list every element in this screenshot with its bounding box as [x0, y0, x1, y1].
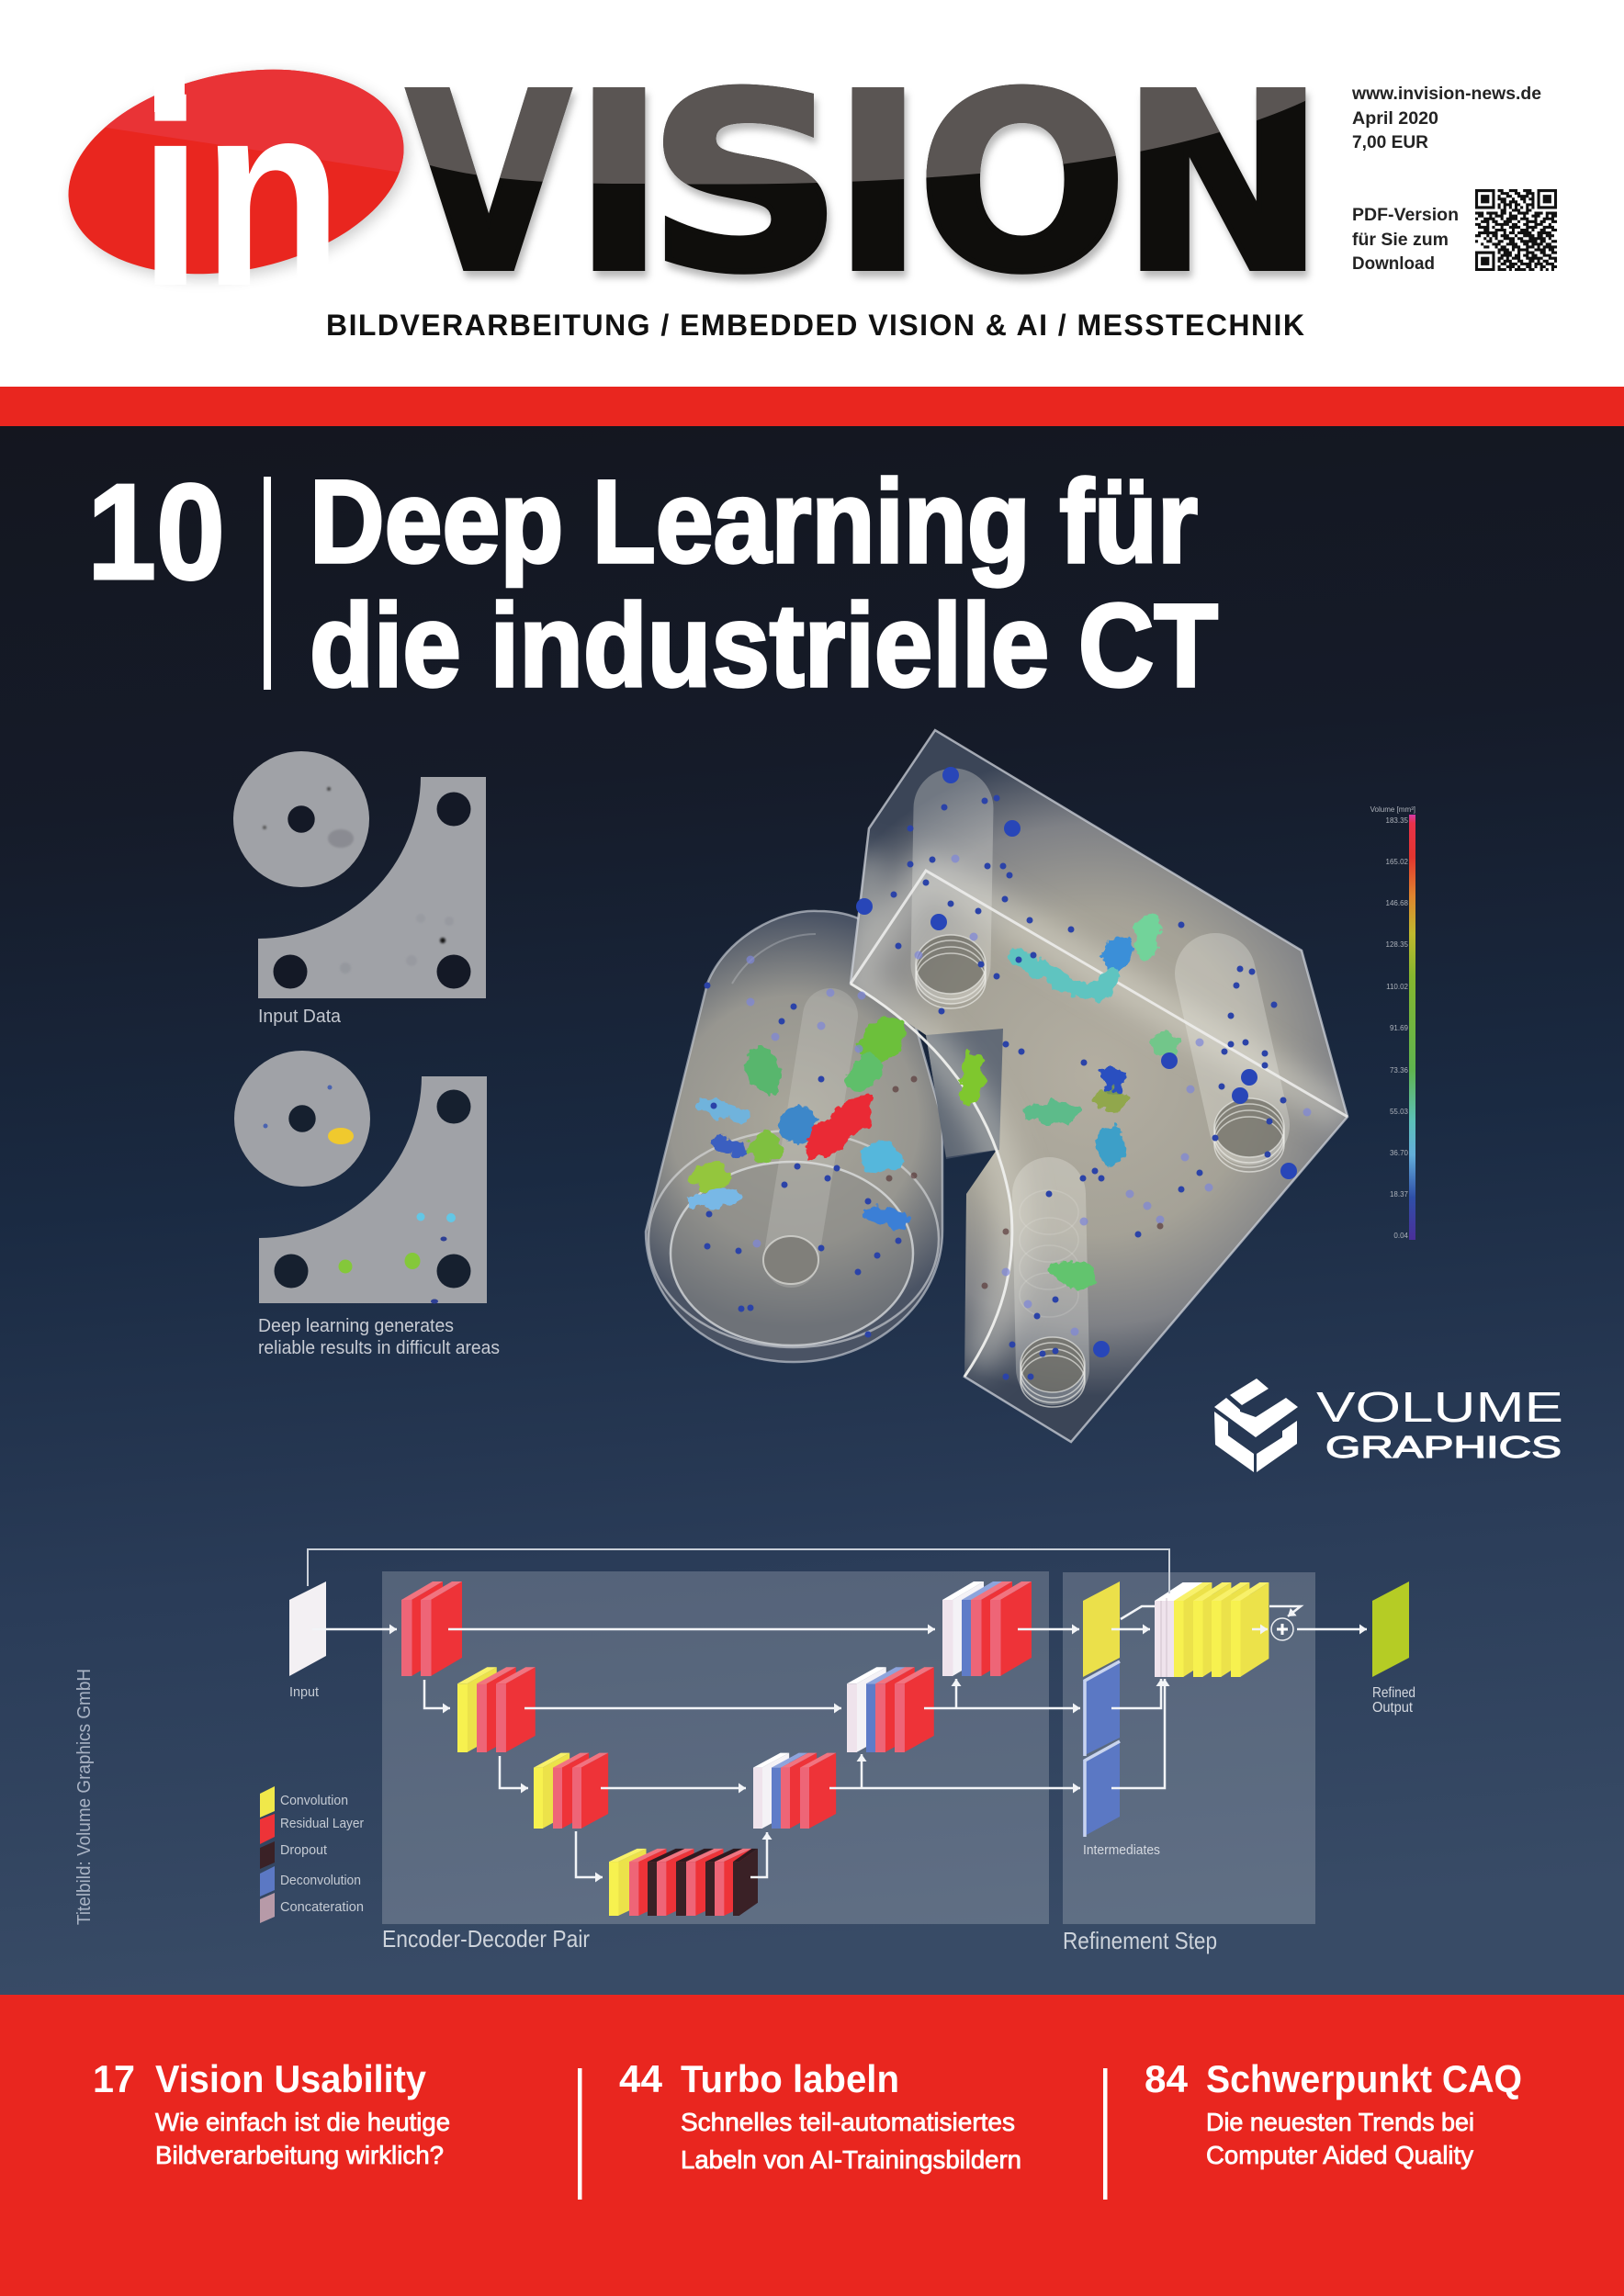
wordmark: GRAPHICS: [1325, 1430, 1562, 1464]
refinement blocks: [1155, 1582, 1269, 1677]
teaser: Vision Usability: Wie einfach ist die heutige: [155, 2108, 450, 2136]
refined output: Output: [1372, 1700, 1414, 1716]
colour scale legend: 110.02: [1386, 983, 1409, 991]
teaser: Schwerpunkt CAQ: 84: [1145, 2057, 1189, 2100]
colour scale legend: Volume [mm³]: [1370, 805, 1415, 814]
caption: deep learning: Deep learning generates: [258, 1316, 454, 1336]
teaser divider: [578, 2068, 582, 2200]
intermediates: Intermediates: [1083, 1842, 1160, 1858]
teaser: Vision Usability: Bildverarbeitung wirklich?: [155, 2141, 444, 2169]
issue information: www.invision-news.de: [1351, 84, 1541, 104]
network diagram: [260, 1549, 1415, 1954]
encoder blocks row 2: [457, 1667, 536, 1752]
intermediates: [1083, 1581, 1160, 1858]
panel: Encoder-Decoder: [382, 1571, 1049, 1953]
input block: [289, 1581, 326, 1700]
teaser: Schwerpunkt CAQ: Computer Aided Quality: [1206, 2141, 1473, 2169]
headline text: die industrielle CT: [310, 580, 1218, 712]
decoder blocks row 3: [753, 1753, 836, 1829]
bores: [951, 808, 1249, 1368]
plate part: [851, 730, 1348, 1442]
teaser: Vision Usability: Vision Usability: [155, 2057, 427, 2100]
photo credit: Titelbild: Volume Graphics GmbH: [74, 1669, 95, 1925]
bottleneck blocks: [609, 1849, 758, 1916]
headline divider: [264, 477, 271, 690]
colour scale legend: 91.69: [1390, 1024, 1409, 1032]
caption: deep learning: [258, 1316, 500, 1358]
panel: Encoder-Decoder: Encoder-Decoder Pair: [382, 1925, 590, 1953]
issue information: Download: [1352, 254, 1435, 274]
issue information: [1351, 84, 1541, 274]
footer band: [0, 1995, 1624, 2296]
caption: deep learning: reliable results in difficult areas: [258, 1338, 500, 1358]
teaser: Vision Usability: 17: [93, 2057, 135, 2100]
logo: VISION wordmark: V: [407, 41, 570, 326]
logo: VISION wordmark: O: [917, 41, 1128, 326]
wordmark: [1316, 1383, 1563, 1464]
subtitle: BILDVERARBEITUNG / EMBEDDED VISION & AI / MESSTECHNIK: [326, 309, 1304, 342]
logo: VISION wordmark: N: [1121, 41, 1325, 326]
teaser: Turbo labeln: Labeln von AI-Trainingsbildern: [681, 2145, 1021, 2174]
teaser: Turbo labeln: Turbo labeln: [681, 2057, 899, 2100]
icon: QR code: [1475, 189, 1557, 271]
refined output: Refined: [1372, 1685, 1415, 1701]
logo: VISION wordmark: I: [573, 41, 665, 326]
colour scale legend: 128.35: [1386, 940, 1409, 949]
teaser: Schwerpunkt CAQ: [1145, 2057, 1522, 2169]
logo: VISION wordmark: I: [832, 41, 924, 326]
colour scale legend: 73.36: [1390, 1066, 1409, 1075]
wordmark: VOLUME: [1316, 1383, 1563, 1431]
panel: Refinement: Refinement Step: [1063, 1927, 1217, 1954]
refined output: [1372, 1581, 1415, 1716]
decoder blocks row 1: [942, 1581, 1032, 1676]
decoder blocks row 2: [847, 1667, 934, 1752]
caption: Input Data: Input Data: [258, 1007, 342, 1027]
teaser: Turbo labeln: [619, 2057, 1021, 2174]
colour scale legend: [1370, 805, 1415, 1240]
headline: [87, 456, 1218, 712]
colour scale legend: 36.70: [1390, 1149, 1409, 1157]
colour scale legend: 18.37: [1390, 1190, 1409, 1199]
encoder blocks row 1: [401, 1581, 462, 1676]
panel: Refinement: [1063, 1572, 1315, 1954]
dark background panel: [0, 426, 1624, 1995]
red band: [0, 387, 1624, 426]
encoder blocks row 3: [534, 1753, 608, 1829]
logo: VISION wordmark: [0, 0, 1624, 367]
issue information: für Sie zum: [1352, 231, 1449, 250]
legend: Convolution: [280, 1793, 348, 1808]
header: logo "inVISION": [66, 68, 1312, 285]
cylinder part: [646, 911, 942, 1362]
input block: Input: [289, 1684, 320, 1700]
page number 10: 10: [87, 456, 225, 608]
CT slice: input data: [233, 751, 486, 1027]
logo: VISION wordmark: S: [647, 41, 844, 326]
Volume Graphics logo: [1214, 1379, 1563, 1472]
teaser divider: [1103, 2068, 1108, 2200]
colour scale legend: 55.03: [1390, 1108, 1409, 1116]
logo: red ellipse with "in": in: [139, 47, 343, 341]
headline text: [310, 456, 1218, 712]
colour scale legend: 0.04: [1393, 1232, 1409, 1240]
plate edges: [851, 730, 1348, 1442]
legend: [260, 1786, 364, 1923]
defects: large coloured blobs: [687, 910, 1179, 1291]
legend: Concateration: [280, 1899, 364, 1915]
3D CT rendering: [646, 730, 1348, 1442]
legend: Residual Layer: [280, 1816, 364, 1831]
legend: Dropout: [280, 1842, 328, 1858]
colour scale legend: 146.68: [1386, 899, 1409, 907]
issue information: PDF-Version: [1352, 206, 1459, 225]
issue information: April 2020: [1352, 109, 1438, 129]
headline text: Deep Learning für: [310, 456, 1198, 588]
issue information: 7,00 EUR: [1352, 133, 1428, 152]
arrows: [308, 1549, 1367, 1877]
icon: Volume Graphics cube: [1214, 1379, 1298, 1472]
teaser: Turbo labeln: Schnelles teil-automatisiertes: [681, 2108, 1015, 2136]
teaser: Schwerpunkt CAQ: Die neuesten Trends bei: [1206, 2108, 1474, 2136]
logo: red ellipse with "in": [66, 68, 413, 285]
teaser: Vision Usability: [93, 2057, 450, 2169]
colour scale legend: 165.02: [1386, 858, 1409, 866]
teaser: Turbo labeln: 44: [619, 2057, 663, 2100]
teaser: Schwerpunkt CAQ: Schwerpunkt CAQ: [1206, 2057, 1522, 2100]
CT slice: deep learning result: [234, 1051, 500, 1358]
defects: small blue pores: [707, 775, 1307, 1377]
colour scale legend: 183.35: [1386, 816, 1409, 825]
legend: Deconvolution: [280, 1873, 361, 1888]
plus node: [1271, 1618, 1293, 1640]
threads: [916, 935, 1284, 1407]
